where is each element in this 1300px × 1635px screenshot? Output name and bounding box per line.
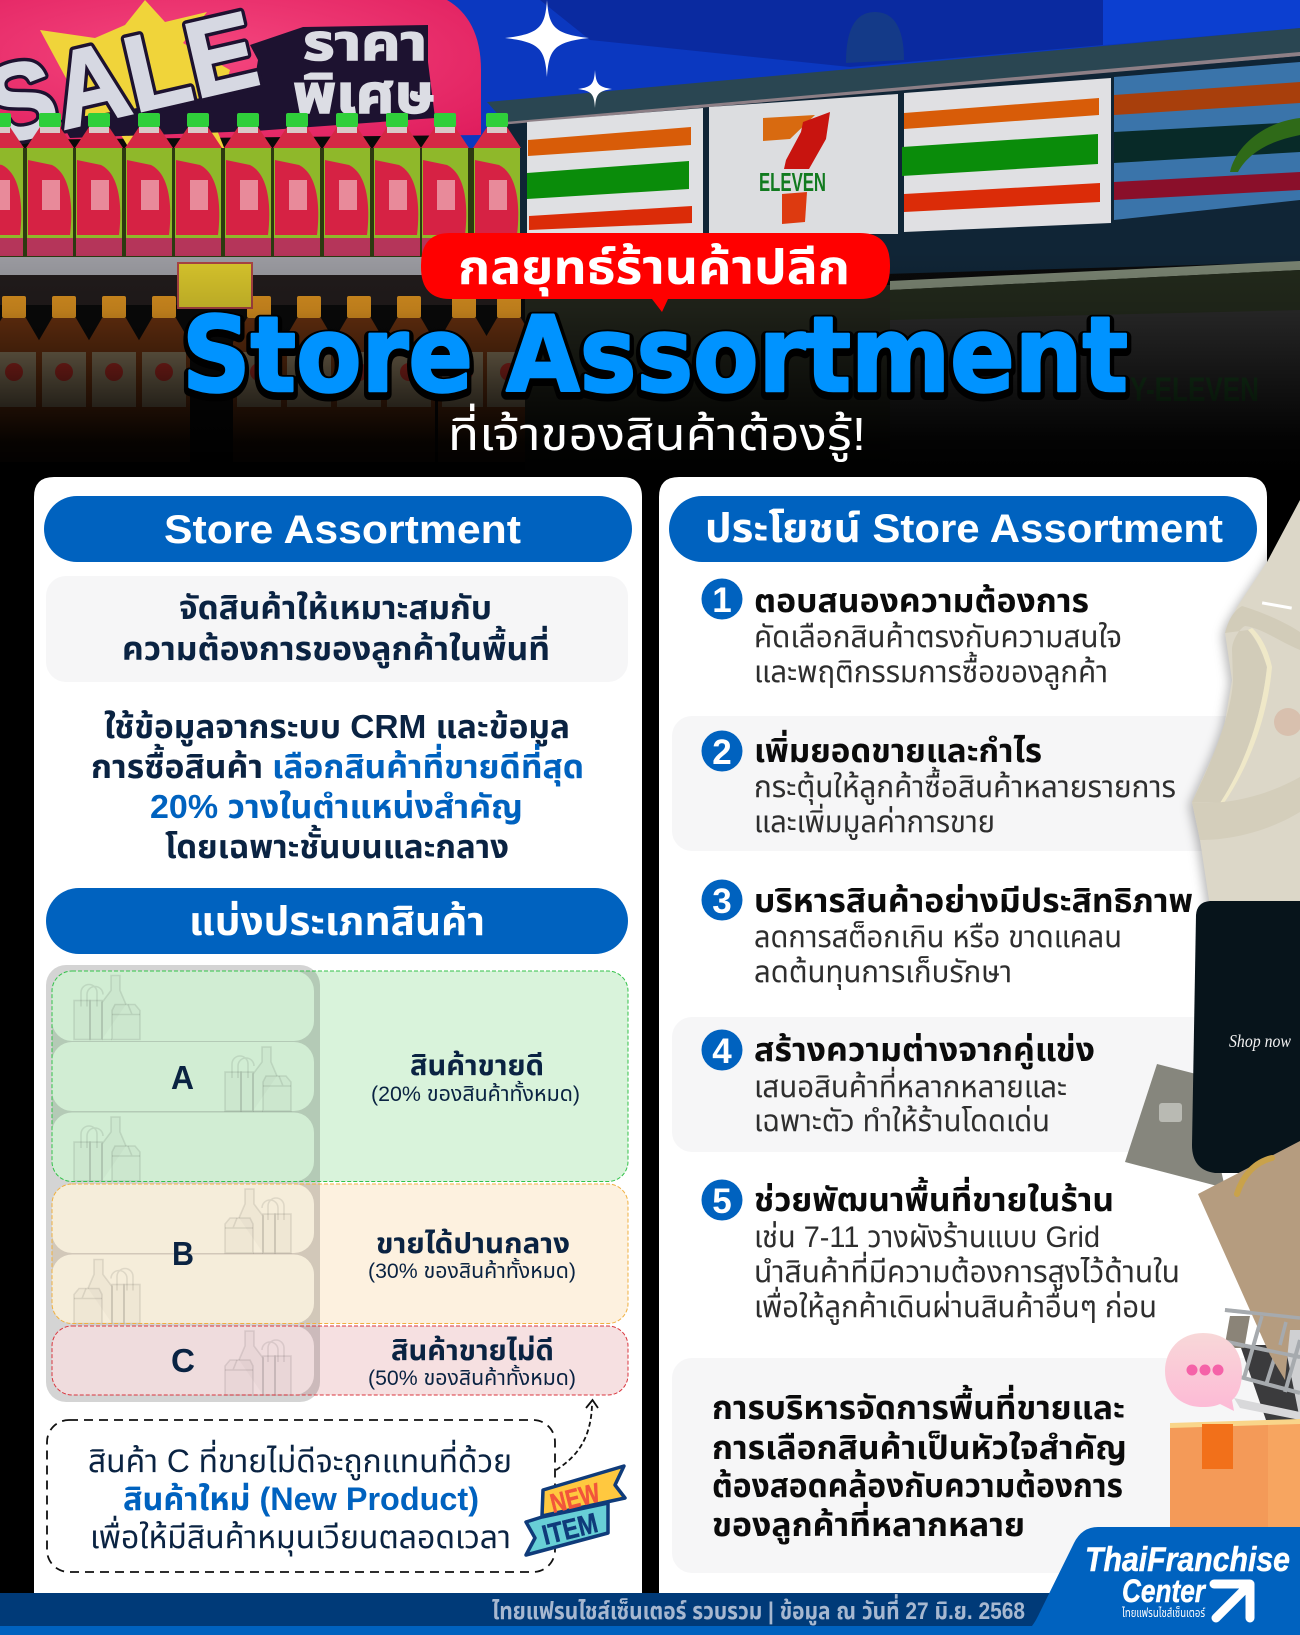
category C: C bbox=[171, 1342, 195, 1379]
heading pill: product categories bbox=[46, 888, 628, 954]
image: orange parcel box bbox=[1170, 1419, 1300, 1535]
image: smartphone bbox=[1192, 901, 1300, 1173]
benefit 5 bbox=[702, 1176, 1180, 1325]
category C: สินค้าขายไม่ดี bbox=[391, 1335, 554, 1366]
icon: pink chat bubble bbox=[1165, 1333, 1242, 1411]
panel 2 bbox=[709, 94, 898, 234]
hero label: red speech pill: กลยุทธ์ร้านค้าปลีก bbox=[458, 242, 850, 297]
special price label: พิเศษ bbox=[293, 65, 435, 125]
awning bbox=[890, 261, 1300, 290]
benefit 4: เฉพาะตัว ทำให้ร้านโดดเด่น bbox=[754, 1105, 1050, 1138]
benefit 3 bbox=[702, 880, 1193, 990]
darkening gradient bbox=[0, 250, 1300, 480]
explanation text: เลือกสินค้าที่ขายดีที่สุด bbox=[272, 743, 584, 787]
arrow: callout to category C bbox=[556, 1400, 598, 1470]
panel 1 bbox=[527, 108, 703, 234]
store fascia lower text: Y-ELEVEN bbox=[1130, 371, 1259, 409]
benefit 4: สร้างความต่างจากคู่แข่ง bbox=[754, 1031, 1095, 1070]
benefit 1: 1 bbox=[712, 581, 732, 620]
category A: (20% ของสินค้าทั้งหมด) bbox=[371, 1080, 580, 1106]
pink promo sign bbox=[0, 0, 481, 140]
category B: (30% ของสินค้าทั้งหมด) bbox=[368, 1257, 576, 1283]
callout: new product replacement: สินค้าใหม่ (New Product) bbox=[123, 1481, 479, 1517]
panel 3 bbox=[904, 78, 1111, 232]
title: Store Assortment: Store Assortment bbox=[182, 294, 1128, 416]
benefit 1 bbox=[702, 578, 1122, 690]
logo: ThaiFranchise Center: Center bbox=[1122, 1573, 1206, 1609]
benefit 3: 3 bbox=[712, 882, 732, 921]
benefit 5: เช่น 7-11 วางผังร้านแบบ Grid bbox=[754, 1221, 1100, 1254]
title: Store Assortment: Store Assortment bbox=[182, 297, 1128, 419]
benefit 3: ลดการสต็อกเกิน หรือ ขาดแคลน bbox=[754, 921, 1122, 954]
benefit 2: 2 bbox=[712, 733, 732, 772]
summary box: การบริหารจัดการพื้นที่ขายและ bbox=[712, 1384, 1125, 1426]
category B: ขายได้ปานกลาง bbox=[376, 1228, 570, 1259]
footer bar: ไทยแฟรนไชส์เซ็นเตอร์ รวบรวม | ข้อมูล ณ วันที่ 27 มิ.ย. 2568 bbox=[492, 1594, 1025, 1626]
heading pill: product categories: แบ่งประเภทสินค้า bbox=[189, 899, 485, 944]
panel: left Store Assortment bbox=[34, 477, 642, 1600]
logo: ThaiFranchise Center bbox=[1020, 1527, 1300, 1635]
icon: arrow bbox=[1214, 1584, 1250, 1618]
image: smartphone: Shop now bbox=[1229, 1031, 1291, 1051]
benefit 1: คัดเลือกสินค้าตรงกับความสนใจ bbox=[754, 621, 1122, 654]
category A bbox=[171, 1050, 580, 1106]
special price label bbox=[293, 15, 435, 125]
benefit 4: 4 bbox=[712, 1032, 732, 1071]
category B bbox=[172, 1228, 576, 1283]
icon: new item badge bbox=[526, 1466, 625, 1555]
icon: new item badge: NEW bbox=[547, 1478, 603, 1519]
heading pill: benefits: ประโยชน์ Store Assortment bbox=[705, 507, 1223, 551]
bottles on shelf bbox=[0, 113, 521, 258]
benefit 1: ตอบสนองความต้องการ bbox=[754, 582, 1089, 619]
category C: (50% ของสินค้าทั้งหมด) bbox=[368, 1364, 576, 1390]
hero background photo: store front: ELEVEN bbox=[759, 167, 826, 197]
panel 4 bbox=[1114, 62, 1300, 220]
benefit 4 bbox=[672, 1017, 1267, 1152]
special price label: ราคา bbox=[303, 15, 427, 71]
hero label: red speech pill bbox=[421, 233, 890, 312]
summary box: ต้องสอดคล้องกับความต้องการ bbox=[712, 1467, 1123, 1504]
explanation text: 20% วางในตำแหน่งสำคัญ bbox=[150, 788, 523, 825]
logo: ThaiFranchise Center: ไทยแฟรนไชส์เซ็นเตอร์ bbox=[1121, 1606, 1205, 1620]
explanation text bbox=[91, 708, 584, 865]
image: credit card bbox=[1125, 1064, 1225, 1188]
sparkle small bbox=[578, 70, 612, 108]
heading pill: Store Assortment bbox=[44, 496, 632, 562]
hero background photo: store front bbox=[0, 0, 1300, 480]
benefit 5: เพื่อให้ลูกค้าเดินผ่านสินค้าอื่นๆ ก่อน bbox=[754, 1286, 1157, 1325]
definition box bbox=[46, 576, 628, 682]
price tag bbox=[178, 263, 252, 308]
benefit 3: ลดต้นทุนการเก็บรักษา bbox=[754, 956, 1012, 990]
category C bbox=[171, 1335, 576, 1390]
callout: new product replacement bbox=[47, 1420, 555, 1572]
ABC shelf chart bbox=[46, 965, 628, 1402]
benefit 5: นำสินค้าที่มีความต้องการสูงไว้ด้านใน bbox=[754, 1251, 1180, 1290]
panel: right benefits bbox=[659, 477, 1267, 1600]
explanation text: ใช้ข้อมูลจากระบบ CRM และข้อมูล bbox=[104, 708, 570, 747]
explanation text: โดยเฉพาะชั้นบนและกลาง bbox=[165, 824, 509, 865]
category B: B bbox=[172, 1235, 194, 1272]
benefit 1: และพฤติกรรมการซื้อของลูกค้า bbox=[754, 651, 1108, 690]
footer bar bbox=[0, 1593, 1300, 1635]
callout: new product replacement: สินค้า C ที่ขายไม่ดีจะถูกแทนที่ด้วย bbox=[88, 1439, 512, 1481]
image: kraft shopping bag bbox=[1198, 1141, 1300, 1380]
category A: A bbox=[171, 1059, 194, 1096]
image: beige sweater bbox=[1192, 500, 1300, 920]
benefit 2: และเพิ่มมูลค่าการขาย bbox=[754, 803, 995, 840]
benefit 5: ช่วยพัฒนาพื้นที่ขายในร้าน bbox=[754, 1176, 1114, 1218]
subtitle: ที่เจ้าของสินค้าต้องรู้! bbox=[448, 403, 866, 462]
benefit 3: บริหารสินค้าอย่างมีประสิทธิภาพ bbox=[754, 882, 1193, 919]
heading pill: benefits bbox=[669, 496, 1257, 562]
benefit 2: เพิ่มยอดขายและกำไร bbox=[754, 729, 1042, 769]
benefit 4: เสนอสินค้าที่หลากหลายและ bbox=[754, 1066, 1067, 1104]
explanation text: การซื้อสินค้า bbox=[91, 743, 263, 785]
icon: new item badge: ITEM bbox=[539, 1507, 601, 1551]
definition box: จัดสินค้าให้เหมาะสมกับ bbox=[179, 589, 492, 626]
heading pill: Store Assortment: Store Assortment bbox=[164, 508, 521, 552]
summary box: การเลือกสินค้าเป็นหัวใจสำคัญ bbox=[712, 1429, 1127, 1466]
benefit 2: กระตุ้นให้ลูกค้าซื้อสินค้าหลายรายการ bbox=[754, 766, 1176, 805]
summary box bbox=[672, 1358, 1267, 1573]
category A: สินค้าขายดี bbox=[410, 1050, 544, 1081]
image: shopping cart bbox=[1224, 1300, 1300, 1420]
sparkle large bbox=[505, 0, 589, 77]
callout: new product replacement: เพื่อให้มีสินค้าหมุนเวียนตลอดเวลา bbox=[90, 1515, 511, 1556]
benefit 5: 5 bbox=[712, 1182, 732, 1221]
definition box: ความต้องการของลูกค้าในพื้นที่ bbox=[122, 625, 550, 669]
summary box: ของลูกค้าที่หลากหลาย bbox=[712, 1501, 1025, 1545]
benefit 2 bbox=[672, 716, 1267, 851]
